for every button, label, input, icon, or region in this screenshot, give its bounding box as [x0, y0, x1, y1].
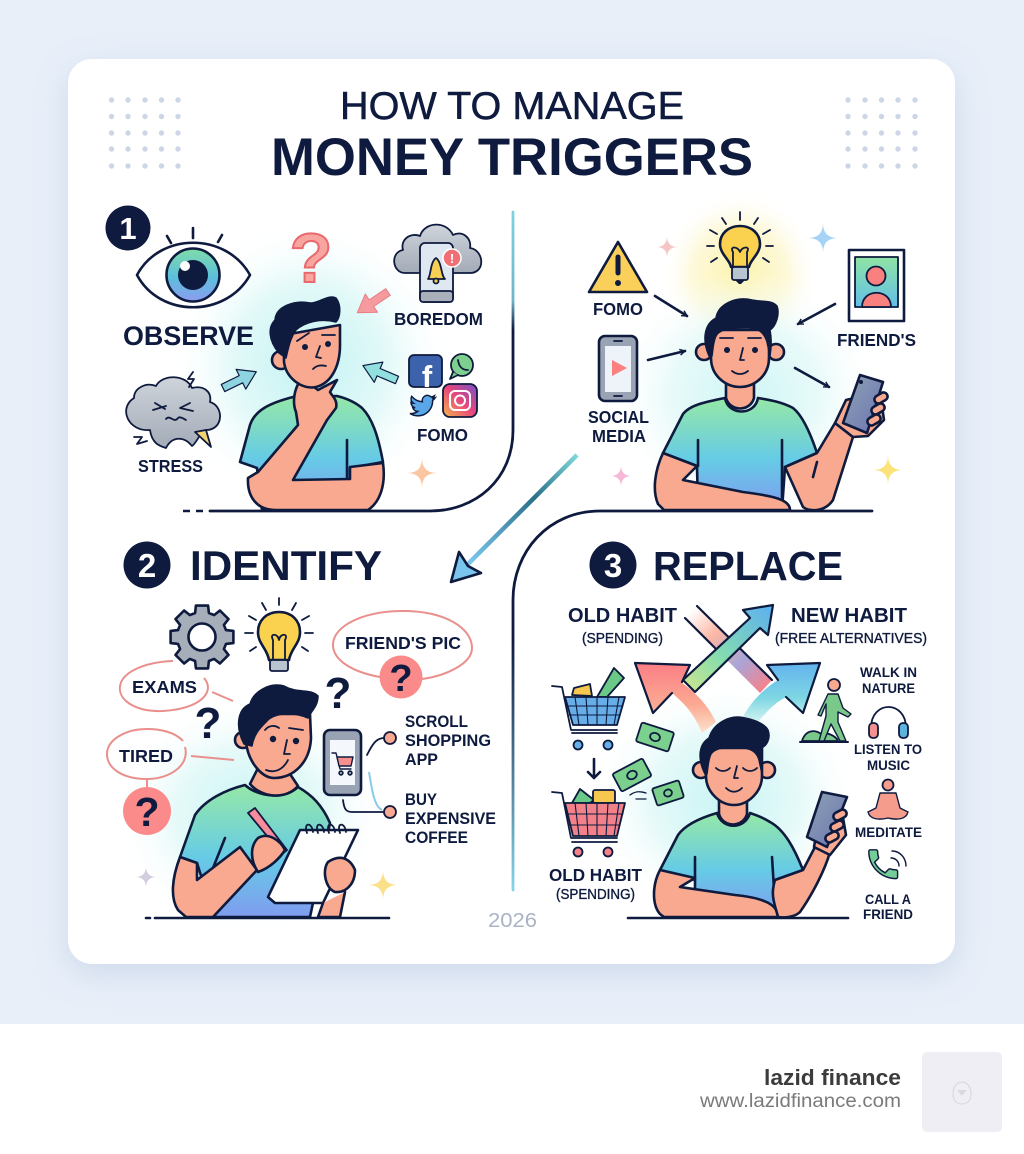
callout: friend's pic with question: FRIEND'S PIC [345, 633, 461, 653]
arrow: down between carts [588, 759, 600, 778]
icon: warning triangle [589, 242, 647, 292]
icon: boredom cloud and phone: ! [450, 251, 454, 266]
label: old habit [568, 605, 677, 647]
label: fomo: FOMO [417, 425, 468, 445]
heading: identify: IDENTIFY [190, 542, 382, 589]
label: friend's: FRIEND'S [837, 330, 916, 350]
callout: friend's pic with question: ? [389, 658, 413, 700]
icon: shopping phone [324, 730, 361, 795]
icon: money bills [612, 722, 684, 806]
label: call a friend: FRIEND [863, 906, 913, 922]
label: old habit bottom [549, 865, 642, 903]
icon: boredom cloud and phone [394, 225, 481, 302]
label: social media: SOCIAL [588, 407, 649, 427]
label: listen to music: LISTEN TO [854, 741, 922, 757]
number badge 3: 3 [604, 547, 622, 584]
icon: friend's photo [849, 250, 904, 321]
number badge 3 [590, 542, 636, 588]
label: old habit: OLD HABIT [568, 605, 677, 627]
connector: scroll shopping app [367, 732, 396, 755]
label: buy expensive coffee: BUY [405, 791, 437, 809]
label: social media: MEDIA [592, 426, 646, 446]
panel: step 3 replace [549, 542, 927, 922]
icon: social apps [409, 354, 477, 417]
person thinking [240, 297, 384, 510]
heading: observe: OBSERVE [123, 321, 254, 351]
label: buy expensive coffee [405, 791, 496, 847]
title: HOW TO MANAGE [340, 85, 684, 128]
icon: headphones [869, 707, 908, 738]
connector: buy expensive coffee [343, 772, 396, 818]
footer brand text: www.lazidfinance.com [699, 1091, 901, 1112]
footer logo tile [922, 1052, 1002, 1132]
label: boredom: BOREDOM [394, 309, 483, 329]
arrow: stress to person [218, 362, 261, 398]
label: new habit: NEW HABIT [791, 605, 907, 627]
label: scroll shopping app: SHOPPING [405, 732, 491, 750]
number badge 1: 1 [119, 211, 137, 246]
sparkle yellow [873, 455, 903, 485]
sparkle [407, 458, 437, 488]
number badge 1 [106, 206, 150, 250]
sparkle yellow [368, 870, 398, 900]
label: new habit: (FREE ALTERNATIVES) [775, 630, 927, 647]
icon: storm cloud [126, 372, 220, 448]
sparkle blue [808, 223, 838, 253]
icon: lightbulb [245, 598, 313, 671]
icon: full red shopping cart [552, 789, 625, 856]
callout: exams: EXAMS [132, 677, 197, 697]
label: listen to music: MUSIC [867, 757, 910, 773]
label: fomo: FOMO [593, 299, 643, 319]
icon: full blue shopping cart [552, 668, 625, 750]
arrow: fomo to person [359, 355, 401, 390]
label: walk in nature [860, 664, 917, 696]
person writing in notebook [173, 685, 358, 917]
baseline [628, 917, 848, 919]
icon: lightbulb [707, 212, 773, 284]
arrows toward person [648, 296, 835, 387]
callout: exams [120, 661, 233, 711]
heading: replace: REPLACE [653, 543, 843, 589]
callout: friend's pic with question [333, 611, 472, 700]
sparkle pale [135, 866, 157, 888]
crossing arrows [635, 605, 820, 733]
label: scroll shopping app [405, 713, 491, 769]
label: buy expensive coffee: COFFEE [405, 829, 468, 847]
sparkle pink lower [610, 465, 632, 487]
dot grid left [109, 97, 181, 169]
icon: meditating person [868, 780, 908, 819]
question marks: ? [325, 669, 351, 718]
label: stress: STRESS [138, 456, 203, 476]
divider top-left panel [210, 212, 513, 511]
label: scroll shopping app: SCROLL [405, 713, 468, 731]
icon: social apps: f [422, 359, 433, 394]
dashes on first baseline [183, 510, 203, 512]
label: listen to music [854, 741, 922, 773]
label: old habit: (SPENDING) [582, 630, 663, 647]
person holding phone [655, 299, 889, 510]
callout: tired with question: ? [134, 789, 160, 835]
number badge 2: 2 [138, 547, 156, 584]
footer brand text [699, 1065, 901, 1112]
label: buy expensive coffee: EXPENSIVE [405, 810, 496, 828]
label: walk in nature: WALK IN [860, 664, 917, 680]
label: scroll shopping app: APP [405, 751, 438, 769]
panel: step 1 observe [106, 206, 483, 510]
arrow: boredom to person [351, 283, 394, 322]
baseline [146, 917, 389, 919]
icon: walking person [800, 679, 851, 742]
divider bottom-right panel [513, 511, 872, 890]
question marks [195, 669, 351, 748]
label: new habit [775, 605, 927, 647]
footer band [0, 1024, 1024, 1154]
icon: gear [171, 606, 233, 668]
title: MONEY TRIGGERS [271, 128, 753, 187]
icon: question mark: ? [290, 219, 332, 297]
icon: eye [131, 228, 255, 311]
transition arrow step 1 to step 2 [451, 455, 577, 582]
label: meditate: MEDITATE [855, 824, 922, 840]
background glows [115, 190, 880, 935]
person meditating with phone [654, 717, 848, 917]
panel: step 1b triggers with person [588, 212, 916, 510]
label: old habit bottom: (SPENDING) [556, 887, 635, 903]
icon: phone with play [599, 336, 637, 401]
callout: tired with question [107, 729, 234, 835]
dot grid right [845, 97, 918, 169]
label: call a friend [863, 891, 913, 922]
callout: tired with question: TIRED [119, 746, 173, 766]
label: social media [588, 407, 649, 446]
label: old habit bottom: OLD HABIT [549, 865, 642, 885]
label: walk in nature: NATURE [862, 680, 915, 696]
title [271, 85, 753, 187]
label: call a friend: CALL A [865, 891, 911, 907]
question marks: ? [195, 699, 221, 748]
main white card [68, 59, 955, 964]
panel: step 2 identify [107, 542, 496, 918]
icon: phone call [869, 850, 906, 879]
footer brand text: lazid finance [764, 1065, 901, 1090]
sparkle pink [656, 236, 678, 258]
number badge 2 [124, 542, 170, 588]
year label: 2026 [488, 910, 537, 932]
